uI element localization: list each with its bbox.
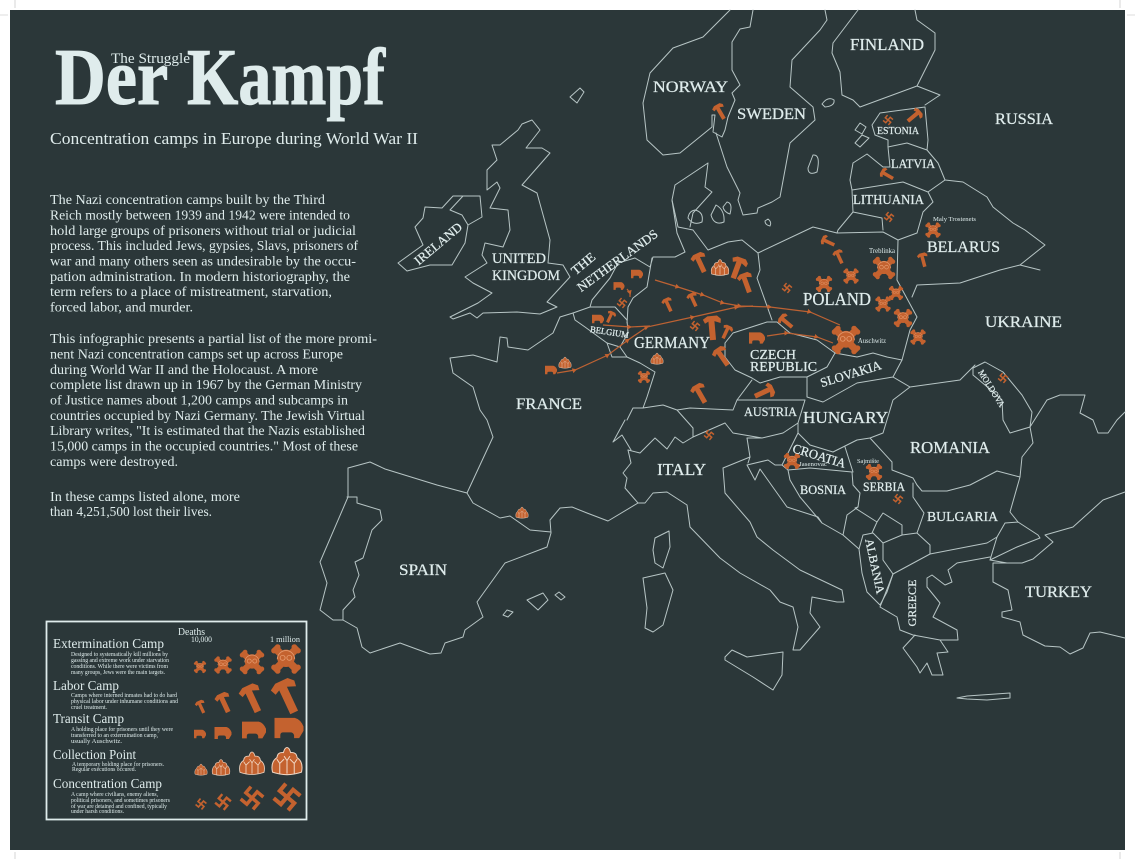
France and Iberia (320, 313, 638, 654)
intro paragraph: term refers to a place of mistreatment, starvation, (50, 284, 332, 299)
country and camp labels: GERMANY (634, 333, 710, 352)
extermination camp entry: Extermination Camp (53, 636, 164, 651)
country and camp labels: AUSTRIA (744, 404, 798, 419)
country and camp labels: CZECH (750, 348, 796, 363)
extermination camp entry: gassing and extreme work under starvation (71, 657, 169, 664)
Italy (628, 423, 844, 650)
country and camp labels: ALBANIA (862, 537, 888, 595)
country and camp labels: Sajmište (857, 459, 879, 465)
intro paragraph: forced labor, and murder. (50, 300, 193, 314)
country and camp labels: FRANCE (516, 396, 582, 413)
country and camp labels: SPAIN (399, 562, 447, 579)
Belarus and Ukraine (912, 180, 1045, 297)
Baltic states (837, 107, 945, 240)
labor camp entry (53, 676, 307, 717)
second paragraph: of Justice names about 1,200 camps and subcamps in (50, 392, 348, 408)
labor camp entry: cruel treatment. (71, 704, 107, 711)
country and camp labels: ESTONIA (877, 125, 919, 137)
collection point entry: Collection Point (53, 747, 136, 762)
country and camp labels: Maly Trostenets (933, 217, 977, 223)
country and camp labels: SWEDEN (737, 106, 806, 123)
country and camp labels: BELARUS (927, 239, 1000, 256)
Turkey (990, 492, 1125, 654)
country and camp labels: KINGDOM (492, 268, 560, 284)
labor camp entry: physical labor under inhumane conditions and (71, 698, 179, 705)
country and camp labels: TURKEY (1025, 584, 1092, 601)
collection point entry (53, 747, 302, 775)
legend frame (46, 622, 306, 820)
labor camp icons on map (604, 102, 930, 406)
country and camp labels: HUNGARY (803, 408, 888, 427)
concentration camp entry: under harsh conditions. (71, 808, 124, 815)
country and camp labels: Jasenovac (799, 462, 827, 468)
Ireland (398, 196, 482, 271)
map of Europe outlines (320, 10, 1125, 700)
closing statement (50, 489, 240, 519)
country and camp labels: UNITED (492, 251, 546, 267)
country and camp labels: REPUBLIC (750, 360, 817, 375)
short route in the Netherlands (627, 289, 630, 297)
intro paragraph: hold large groups of prisoners without trial or judicial (50, 223, 356, 238)
Czech Republic (725, 322, 835, 383)
concentration camp entry: A camp where civilians, enemy aliens, (71, 791, 158, 798)
second paragraph: Library writes, "It is estimated that the Nazis established (50, 423, 365, 438)
Low countries and Germany (573, 200, 752, 420)
islands (503, 88, 1010, 700)
United Kingdom (450, 120, 570, 319)
intro paragraph: pation administration. In modern historiography, the (50, 269, 350, 284)
transit camp entry: A holding place for prisoners until they were (71, 726, 173, 733)
extermination camp entry (53, 636, 301, 676)
concentration camp entry (53, 776, 300, 815)
Greece (880, 554, 990, 675)
transport routes (557, 280, 840, 373)
extermination camp entry: Designed to systematically kill millions by (71, 651, 169, 658)
scale maximum: 1 million (270, 634, 301, 644)
Portugal border and Pyrenees (343, 493, 551, 620)
Finland (832, 10, 940, 107)
country and camp labels: SERBIA (863, 479, 906, 494)
country and camp labels: ROMANIA (910, 438, 991, 457)
second paragraph: camps were destroyed. (50, 454, 178, 469)
country and camp labels: BOSNIA (800, 482, 847, 497)
country and camp labels: LATVIA (891, 156, 936, 171)
deaths scale heading: Deaths (178, 626, 205, 638)
scale minimum: 10,000 (191, 634, 212, 644)
transit camp entry (53, 711, 304, 745)
extermination camp entry: many groups, Jews were the main targets. (71, 669, 165, 676)
transit camp entry: usually Auschwitz. (71, 738, 122, 745)
Balkans (747, 433, 917, 605)
title block (50, 34, 418, 148)
second paragraph: 15,000 camps in the occupied countries." Most of these (50, 438, 358, 454)
transit camp icons on map (545, 270, 765, 374)
country and camp labels: UKRAINE (985, 314, 1062, 331)
second paragraph: complete list drawn up in 1967 by the German Ministry (50, 377, 362, 392)
main title: Der (55, 34, 167, 122)
title translation: The Struggle (111, 51, 190, 67)
country and camp labels: SLOVAKIA (818, 357, 884, 390)
country and camp labels: BELGIUM (589, 324, 630, 340)
Poland (757, 227, 917, 360)
country and camp labels: RUSSIA (995, 111, 1053, 128)
concentration camp entry: political prisoners, and sometimes prisoners (71, 797, 171, 804)
main title: Kampf (187, 34, 386, 122)
country and camp labels: MOLDOVA (976, 368, 1007, 409)
labor camp entry: Labor Camp (53, 678, 119, 693)
country and camp labels: Auschwitz (858, 337, 886, 345)
collection point entry: A temporary holding place for prisoners. (72, 761, 164, 768)
extermination camp entry: conditions. While there were victims from (71, 663, 168, 670)
intro paragraph: Reich mostly between 1939 and 1942 were intended to (50, 208, 350, 222)
intro paragraph: war and many others seen as undesirable by the occu- (50, 254, 357, 268)
second paragraph: countries occupied by Nazi Germany. The Jewish Virtual (50, 408, 365, 423)
country and camp labels: BULGARIA (927, 510, 999, 525)
Romania and Bulgaria (870, 427, 1040, 560)
route from Czech Republic to Auschwitz (767, 333, 833, 343)
transit camp entry: transferred to an extermination camp, (71, 732, 158, 739)
concentration camp entry: of war are detained and confined, typically (71, 803, 168, 810)
transit camp entry: Transit Camp (53, 711, 124, 726)
Norway (643, 10, 753, 155)
legend panel (46, 622, 307, 820)
collection point icons on map (516, 260, 729, 518)
subtitle: Concentration camps in Europe during World War II (50, 129, 418, 148)
country and camp labels: NETHERLANDS (574, 226, 661, 295)
Switzerland (613, 410, 693, 450)
route from Netherlands to Auschwitz (655, 280, 840, 325)
second paragraph: nent Nazi concentration camps set up across Europe (50, 346, 343, 362)
concentration camp icons on map (617, 115, 1008, 504)
intro paragraph: The Nazi concentration camps built by the Third (50, 192, 325, 207)
second paragraph: during World War II and the Holocaust. A more (50, 362, 318, 377)
country and camp labels: THE (568, 249, 598, 278)
country and camp labels: POLAND (803, 289, 871, 309)
intro paragraph (50, 192, 359, 314)
country and camp labels (399, 35, 1092, 626)
country and camp labels: CROATIA (791, 440, 848, 471)
country and camp labels: IRELAND (411, 219, 465, 268)
country and camp labels: LITHUANIA (853, 193, 925, 208)
country and camp labels: NORWAY (653, 79, 728, 96)
Moldova and Black Sea coast (973, 362, 1125, 433)
country and camp labels: ITALY (657, 460, 706, 479)
closing statement: In these camps listed alone, more (50, 489, 240, 504)
country and camp labels: Treblinka (869, 247, 896, 255)
intro paragraph: process. This included Jews, gypsies, Slavs, prisoners of (50, 238, 359, 253)
concentration camp entry: Concentration Camp (53, 776, 162, 791)
second paragraph (50, 331, 378, 469)
Sweden (716, 10, 827, 215)
country and camp labels: GREECE (905, 580, 919, 626)
collection point entry: Regular executions occured. (72, 766, 136, 773)
Slovakia, Austria, Hungary (725, 360, 975, 457)
route from Belgium (603, 325, 650, 327)
country and camp labels: FINLAND (850, 35, 924, 54)
route from France to Poland (557, 306, 753, 373)
second paragraph: This infographic presents a partial list of the more promi- (50, 331, 378, 346)
extermination camp icons on map (638, 222, 941, 480)
labor camp entry: Camps where interned inmates had to do hard (71, 692, 178, 699)
closing statement: than 4,251,500 lost their lives. (50, 504, 212, 519)
Denmark and islands (672, 163, 758, 253)
